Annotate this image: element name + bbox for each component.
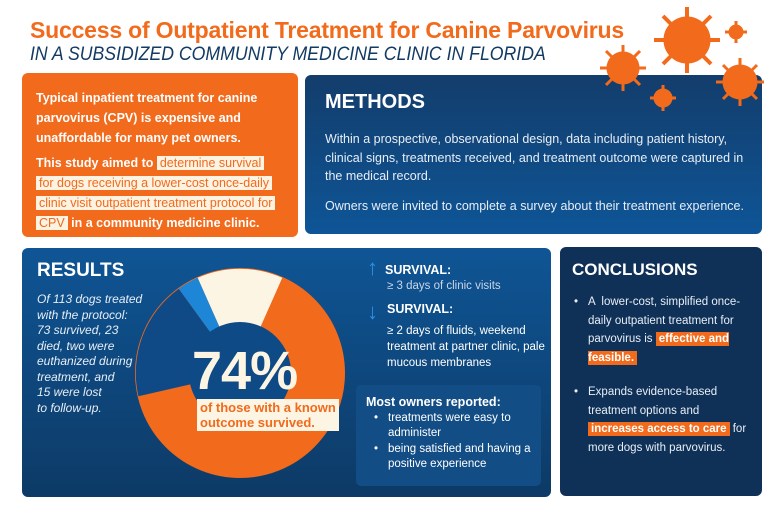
icon: down arrow: ↓	[367, 299, 378, 324]
text: results summary: euthanized during	[37, 354, 132, 368]
text: conclusions	[574, 296, 746, 454]
text: background: unaffordable for many pet owners.	[36, 131, 241, 145]
text: conclusions: Expands evidence-based treatment options and increases access to care for more dogs with parvovirus.	[588, 386, 746, 454]
text: aim: This study aimed to determine survival	[36, 156, 261, 170]
box: owners reported: •	[374, 412, 378, 424]
text: conclusions: A lower-cost, simplified once-daily outpatient treatment for parvovirus is effective and feasible.	[588, 296, 740, 364]
box: owners reported: treatments were easy to administer	[388, 412, 511, 439]
panel: results	[22, 248, 551, 497]
text: survival factors: ≥ 2 days of fluids, weekend treatment at partner clinic, pale mucous membranes	[387, 325, 545, 369]
text: results summary: to follow-up.	[37, 400, 102, 414]
box: owners reported	[356, 385, 541, 486]
text: survival factors	[367, 255, 545, 369]
subtitle: IN A SUBSIDIZED COMMUNITY MEDICINE CLINIC IN FLORIDA	[30, 44, 546, 65]
chart: donut	[135, 268, 345, 478]
text: methods: clinical signs, treatments received, and treatment outcome were captured in	[325, 150, 743, 164]
text: conclusions: •	[574, 296, 578, 308]
callout: survived: of those with a known	[200, 400, 336, 415]
text: aim: clinic visit outpatient treatment protocol for	[39, 196, 272, 210]
box: owners reported: being satisfied and having a positive experience	[388, 442, 531, 470]
text: background: parvovirus (CPV) is expensive and	[36, 111, 241, 125]
callout: survived: outcome survived.	[200, 415, 315, 430]
text: survival factors: SURVIVAL:	[385, 263, 451, 277]
text: results summary: with the protocol:	[37, 308, 128, 322]
text: methods: the medical record.	[325, 169, 431, 183]
heading: results: RESULTS	[37, 260, 124, 281]
panel: background	[22, 73, 298, 237]
panel: methods	[305, 75, 762, 234]
text: aim: CPV in a community medicine clinic.	[39, 216, 259, 230]
text: background	[36, 91, 257, 145]
text: results summary	[37, 292, 142, 414]
stat: 74%: 74%	[192, 341, 297, 401]
text: aim	[36, 156, 275, 230]
icon: up arrow: ↑	[367, 255, 378, 280]
text: results summary: Of 113 dogs treated	[37, 292, 142, 306]
box: owners reported: •	[374, 442, 378, 454]
text: methods: Within a prospective, observational design, data including patient history,	[325, 132, 727, 146]
heading: methods: METHODS	[325, 91, 425, 113]
text: aim: for dogs receiving a lower-cost once-daily	[39, 176, 269, 190]
title: Success of Outpatient Treatment for Canine Parvovirus	[30, 17, 624, 43]
panel: conclusions	[560, 247, 762, 496]
text: methods	[325, 132, 744, 212]
box: owners reported: Most owners reported:	[366, 395, 501, 409]
text: survival factors: SURVIVAL:	[387, 302, 453, 316]
text: results summary: 15 were lost	[37, 385, 102, 399]
heading: conclusions: CONCLUSIONS	[572, 260, 698, 279]
text: methods: Owners were invited to complete a survey about their treatment experience.	[325, 198, 744, 212]
text: results summary: died, two were	[37, 338, 114, 352]
text: results summary: 73 survived, 23	[37, 323, 118, 337]
text: background: Typical inpatient treatment for canine	[36, 91, 257, 105]
text: conclusions: •	[574, 386, 578, 398]
icon: viruses	[600, 7, 764, 111]
callout: survived	[197, 399, 339, 431]
text: survival factors: ≥ 3 days of clinic visits	[387, 280, 501, 292]
text: results summary: treatment, and	[37, 370, 114, 384]
